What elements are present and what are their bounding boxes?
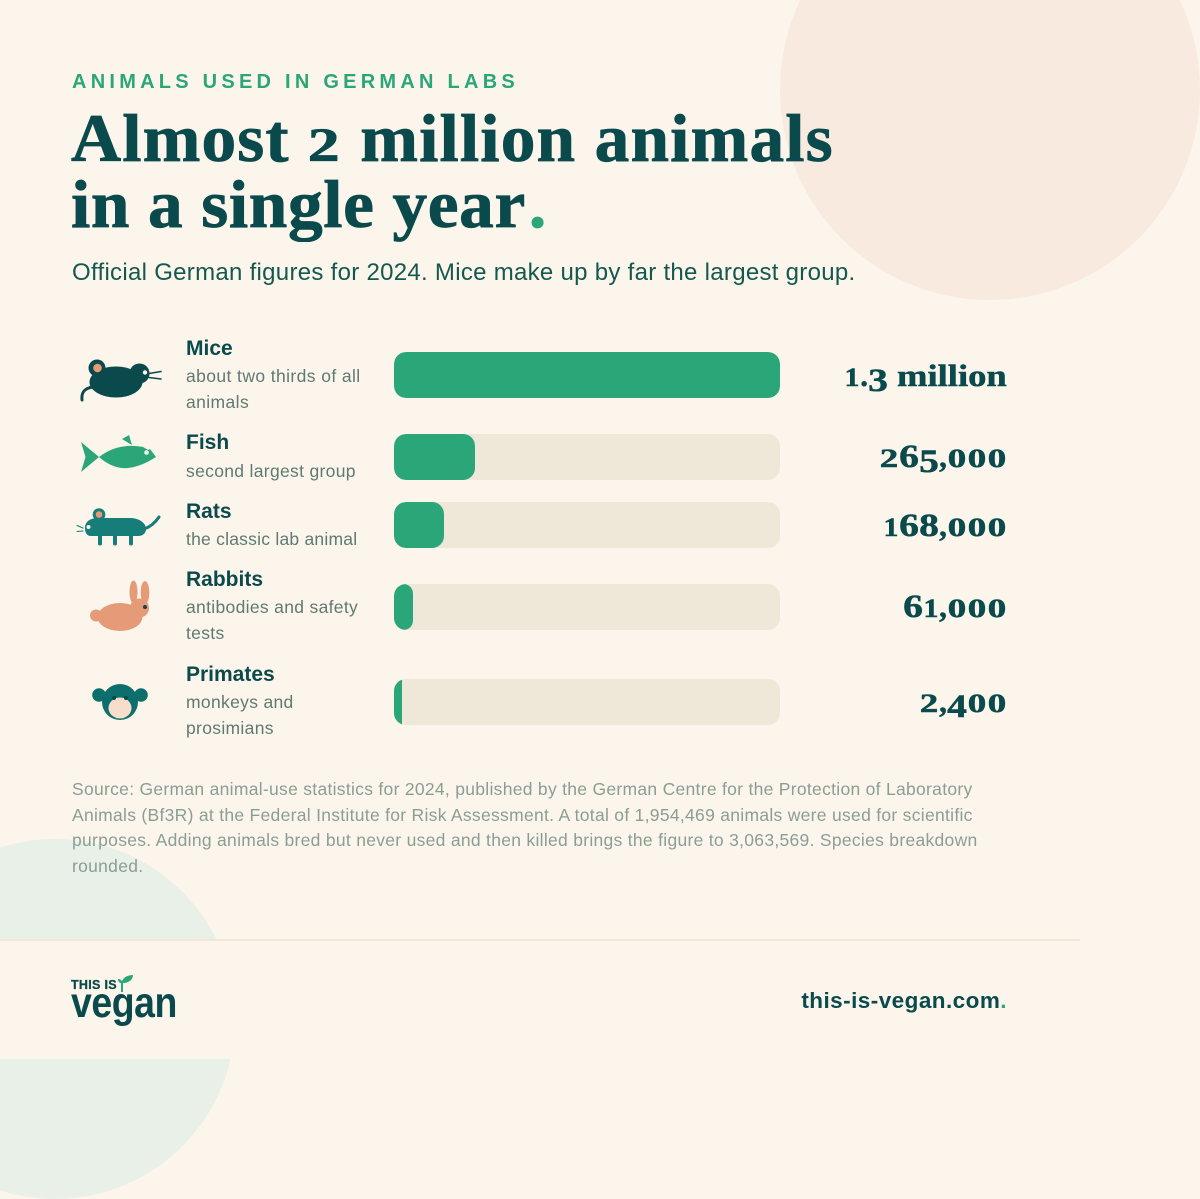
source note: purposes. Adding animals bred but never used and then killed brings the figure to 3,063,569. Species breakdown	[72, 830, 978, 850]
title	[71, 100, 834, 242]
value: fish: 6	[899, 439, 919, 475]
description: mice: about two thirds of all	[186, 366, 361, 386]
label: primates: Primates	[186, 663, 275, 686]
value: rabbits: 0	[948, 594, 966, 623]
bar: rats	[394, 502, 780, 548]
value: mice: 3	[868, 363, 888, 399]
value: mice: .	[860, 358, 868, 393]
value: fish	[880, 439, 1006, 480]
footer	[0, 939, 1080, 1059]
value: mice: 1	[845, 363, 860, 392]
title: 2	[308, 119, 342, 172]
description: rats: the classic lab animal	[186, 529, 357, 549]
source note: Animals (Bf3R) at the Federal Institute for Risk Assessment. A total of 1,954,469 animals were used for scientific	[72, 804, 973, 824]
label: mice: Mice	[186, 337, 233, 360]
value: rabbits: 0	[968, 594, 986, 623]
decorative circle: top right	[780, 0, 1200, 300]
value: primates: 2	[920, 689, 938, 718]
value: fish: 5	[919, 444, 939, 480]
value: rabbits: 1	[924, 594, 938, 623]
value: rabbits: 0	[988, 594, 1006, 623]
icon: rat	[76, 508, 161, 546]
value: rats: 1	[884, 513, 898, 542]
description: rabbits	[186, 597, 358, 643]
logo text: vegan: vegan	[71, 979, 177, 1027]
value: rats: 0	[968, 513, 986, 542]
value: rats: 8	[919, 508, 939, 544]
value: rats: 6	[899, 508, 919, 544]
value: mice	[845, 358, 1007, 399]
source note	[72, 779, 978, 876]
label: fish: Fish	[186, 431, 229, 454]
logo text: this is: THIS IS	[71, 978, 117, 992]
value: fish: 0	[948, 444, 966, 473]
icon: fish	[81, 435, 156, 472]
value: primates: 0	[968, 689, 986, 718]
value: fish: ,	[939, 439, 947, 474]
description: rabbits: antibodies and safety	[186, 597, 358, 617]
bar: mice	[394, 352, 780, 398]
value: rats: 0	[948, 513, 966, 542]
bar: primates	[394, 679, 780, 725]
source note: Source: German animal-use statistics for 2024, published by the German Centre for the Protection of Laboratory	[72, 779, 973, 799]
value: primates: 4	[947, 689, 967, 725]
logo	[71, 975, 177, 1027]
icon: monkey	[92, 684, 148, 720]
bar: rabbits	[394, 584, 780, 630]
value: rats: ,	[939, 508, 947, 543]
value: primates: 0	[988, 689, 1006, 718]
value: rats	[884, 508, 1006, 544]
value: fish: 2	[880, 444, 898, 473]
value: primates	[920, 684, 1006, 725]
logo sprout	[118, 975, 133, 992]
icon: rabbit	[90, 580, 150, 631]
title: Almost million animals	[71, 100, 834, 176]
decorative circle: bottom left	[0, 839, 235, 1199]
value: fish: 0	[968, 444, 986, 473]
subtitle: Official German figures for 2024. Mice make up by far the largest group.	[72, 259, 855, 286]
value: primates: ,	[939, 684, 947, 719]
value: fish: 0	[988, 444, 1006, 473]
description: rabbits: tests	[186, 623, 225, 643]
eyebrow heading: ANIMALS USED IN GERMAN LABS	[72, 71, 519, 93]
value: rabbits	[903, 589, 1006, 625]
description: primates: monkeys and	[186, 692, 294, 712]
website: this-is-vegan.com.	[801, 988, 1007, 1013]
source note: rounded.	[72, 856, 143, 876]
value: rabbits: 6	[903, 589, 923, 625]
description: mice: animals	[186, 392, 249, 412]
description: primates	[186, 692, 294, 738]
icon: mouse	[80, 360, 162, 402]
value: rats: 0	[988, 513, 1006, 542]
description: primates: prosimians	[186, 718, 274, 738]
label: rabbits: Rabbits	[186, 568, 263, 591]
description: mice	[186, 366, 361, 412]
value: rabbits: ,	[939, 589, 947, 624]
value: mice: million	[897, 358, 1007, 393]
description: fish: second largest group	[186, 461, 356, 481]
label: rats: Rats	[186, 500, 232, 523]
title: in a single year.	[71, 166, 547, 242]
bar: fish	[394, 434, 780, 480]
